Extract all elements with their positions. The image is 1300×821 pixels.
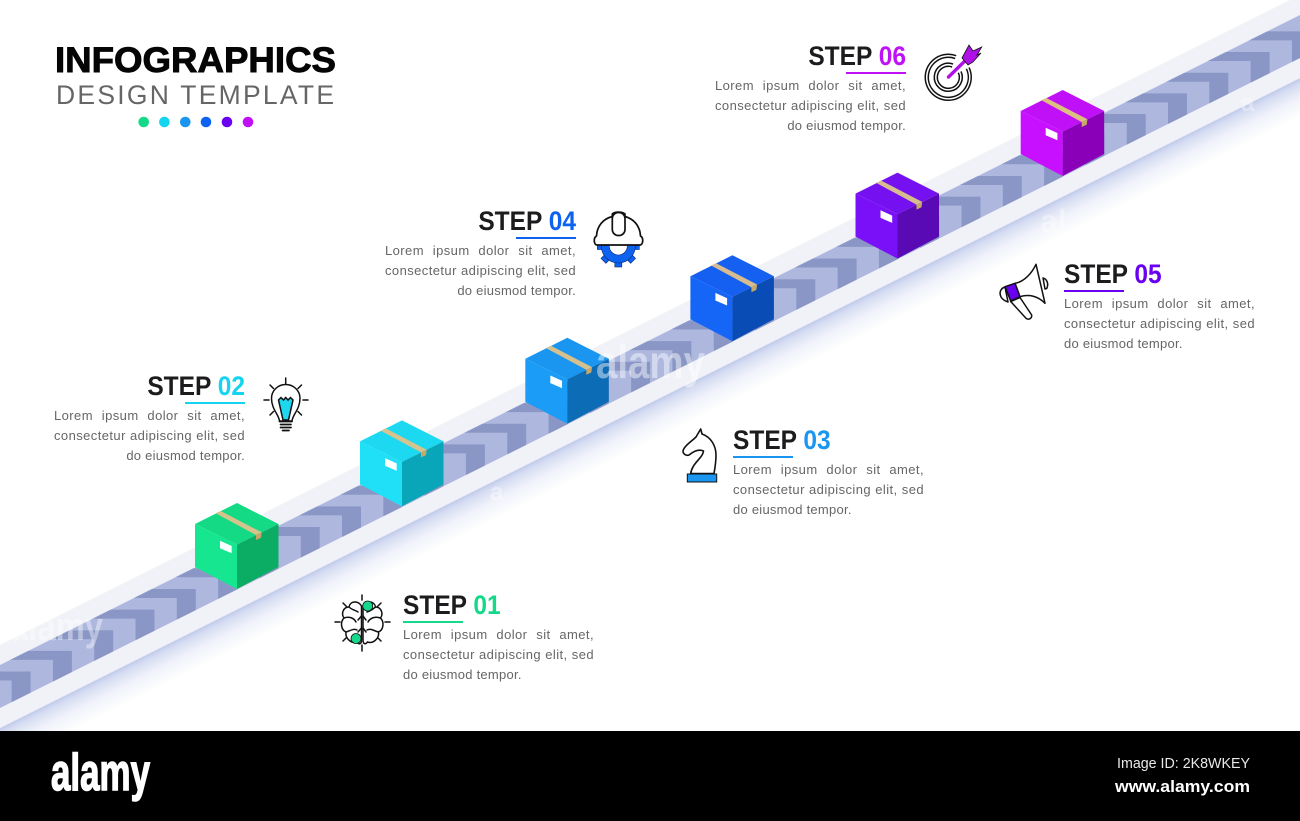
step 04 text: STEP 04 — [478, 206, 576, 236]
icon: megaphone — [1000, 264, 1048, 319]
step 02 text — [54, 371, 245, 462]
title: INFOGRAPHICS — [55, 41, 336, 80]
step 02 text: consectetur adipiscing elit, sed — [54, 428, 245, 442]
step 02 text: Lorem ipsum dolor sit amet, — [54, 408, 245, 422]
step 01 text: Lorem ipsum dolor sit amet, — [403, 626, 594, 642]
step 04 text: Lorem ipsum dolor sit amet, — [385, 242, 576, 258]
step 05 text — [1064, 259, 1255, 350]
box 1: green — [195, 503, 278, 589]
box 4: blue — [690, 255, 774, 341]
step 03 text: STEP 03 — [733, 425, 831, 455]
icon: target with dart — [925, 45, 982, 100]
watermarks: alamy — [596, 336, 705, 388]
step 05 text: do eiusmod tempor. — [1064, 336, 1183, 350]
step 03 text: consectetur adipiscing elit, sed — [733, 482, 924, 496]
image id and site: Image ID: 2K8WKEY — [1117, 756, 1250, 772]
box 6: magenta — [1021, 90, 1104, 176]
icon: helmet and gear — [594, 212, 643, 267]
watermarks: alamy — [10, 605, 104, 649]
image id and site — [1114, 756, 1250, 796]
icon: light bulb — [264, 378, 308, 430]
step 04 text: consectetur adipiscing elit, sed — [385, 262, 576, 278]
step 06 text: consectetur adipiscing elit, sed — [715, 98, 906, 112]
step 05 text: consectetur adipiscing elit, sed — [1064, 316, 1255, 330]
footer bar — [0, 731, 1300, 821]
image id and site: www.alamy.com — [1114, 778, 1250, 796]
step 05 text: Lorem ipsum dolor sit amet, — [1064, 296, 1255, 310]
step 06 text: STEP 06 — [808, 41, 906, 71]
watermarks — [10, 90, 1255, 649]
step 06 text — [715, 41, 906, 132]
box 3: light blue — [525, 338, 609, 424]
step 04 text — [385, 206, 576, 298]
box 5: violet — [856, 173, 939, 259]
step 02 text: STEP 02 — [147, 371, 245, 401]
icon: brain — [335, 595, 390, 651]
icon: chess knight — [683, 429, 717, 482]
step 01 text: do eiusmod tempor. — [403, 666, 522, 682]
watermarks: a — [1241, 90, 1255, 117]
step 01 text: consectetur adipiscing elit, sed — [403, 646, 594, 662]
alamy logo: alamy — [51, 744, 150, 802]
step 02 text: do eiusmod tempor. — [126, 448, 245, 462]
watermarks: al — [1040, 203, 1067, 239]
watermarks: a — [490, 479, 504, 506]
title — [55, 41, 336, 110]
step 06 text: Lorem ipsum dolor sit amet, — [715, 78, 906, 92]
step 03 text: do eiusmod tempor. — [733, 502, 852, 516]
step 05 text: STEP 05 — [1064, 259, 1162, 289]
title: DESIGN TEMPLATE — [56, 80, 334, 110]
step 06 text: do eiusmod tempor. — [787, 118, 906, 132]
title dots — [138, 117, 253, 127]
box 2: cyan — [360, 420, 444, 506]
step 03 text: Lorem ipsum dolor sit amet, — [733, 462, 924, 476]
step 01 text — [403, 590, 594, 682]
step 01 text: STEP 01 — [403, 590, 501, 620]
step 04 text: do eiusmod tempor. — [457, 282, 576, 298]
step 03 text — [733, 425, 924, 516]
